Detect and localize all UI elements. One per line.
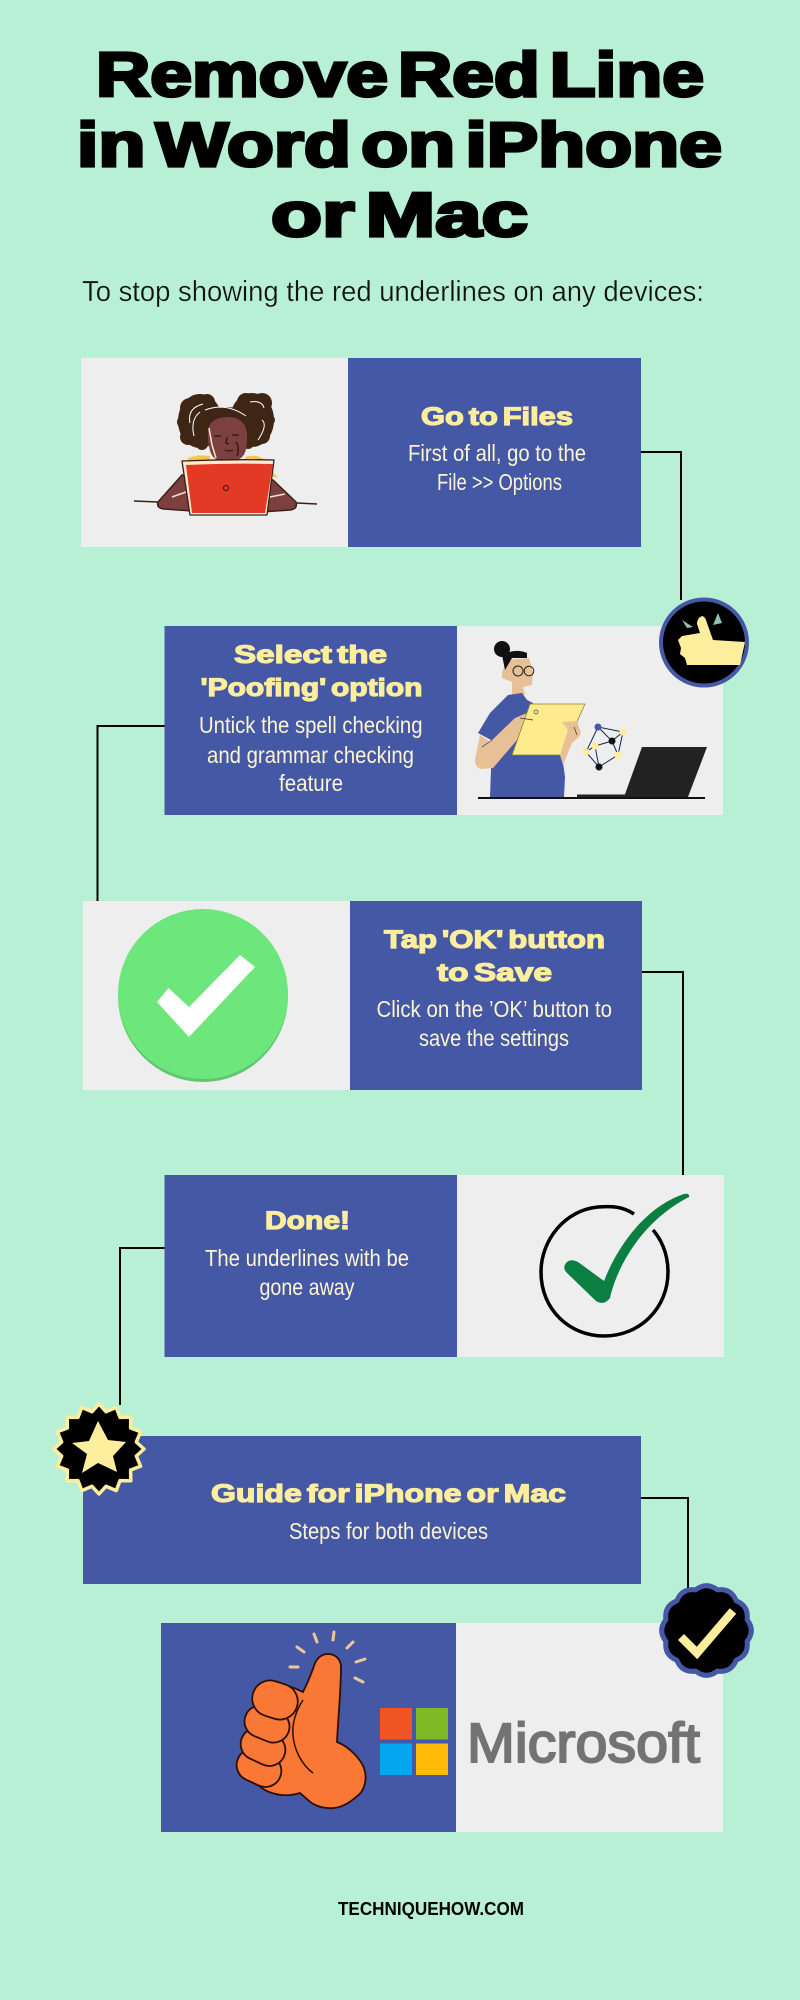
text: done body: The underlines with be (205, 1245, 409, 1271)
connector: step 1 to step 2 (641, 452, 681, 600)
panel: done (164, 1175, 724, 1357)
title (77, 41, 722, 250)
badge: check mark (662, 1586, 751, 1675)
heading: select the poofing option: 'Poofing' option (200, 674, 422, 702)
title: in Word on iPhone (77, 111, 722, 180)
text: tap ok body: save the settings (419, 1025, 569, 1051)
subtitle: To stop showing the red underlines on any devices: (82, 276, 704, 308)
text: go to files body (408, 440, 586, 495)
text: go to files body: File >> Options (437, 469, 562, 495)
text: done body (205, 1245, 409, 1300)
text: go to files body: First of all, go to the (408, 440, 586, 466)
title: or Mac (271, 181, 528, 250)
text: select the poofing body: Untick the spell checking (199, 712, 422, 738)
panel: guide for iphone or mac (83, 1436, 641, 1584)
text: tap ok body: Click on the ’OK’ button to (376, 996, 612, 1022)
badge: star (54, 1404, 144, 1494)
panel: select the poofing option (164, 626, 723, 815)
icon: microsoft logo squares (380, 1708, 448, 1775)
text: select the poofing body: feature (279, 770, 343, 796)
panel: tap ok button (83, 901, 642, 1090)
text: select the poofing body: and grammar checking (207, 742, 414, 768)
text: select the poofing body (199, 712, 422, 796)
heading: select the poofing option (200, 641, 422, 702)
heading: tap ok button: Tap 'OK' button (384, 926, 605, 954)
connector: step 2 to step 3 (98, 726, 165, 901)
icon: orange thumbs up (231, 1632, 366, 1808)
icon: girl with red laptop (134, 393, 317, 515)
heading: select the poofing option: Select the (234, 641, 387, 669)
heading: go to files: Go to Files (421, 403, 573, 431)
connector: step 4 to step 5 (120, 1248, 165, 1405)
heading: done: Done! (265, 1207, 350, 1235)
footer: site name: TECHNIQUEHOW.COM (338, 1899, 524, 1919)
text: microsoft wordmark: Microsoft (467, 1711, 700, 1774)
title: Remove Red Line (96, 41, 704, 110)
connector: step 3 to step 4 (642, 972, 683, 1175)
panel: go to files (81, 358, 641, 547)
heading: tap ok button: to Save (437, 959, 552, 987)
badge: thumbs up (661, 600, 747, 686)
text: guide body: Steps for both devices (289, 1518, 488, 1544)
icon: woman with tablet and laptop (475, 641, 707, 798)
connector: step 5 to final panel (641, 1498, 688, 1590)
text: done body: gone away (260, 1274, 355, 1300)
panel: microsoft final (161, 1623, 723, 1832)
icon: green tick in circle (541, 1194, 689, 1336)
text: tap ok body (376, 996, 612, 1051)
heading: guide for iphone or mac: Guide for iPhone or Mac (211, 1480, 566, 1508)
heading: tap ok button (384, 926, 605, 987)
icon: green check circle (118, 909, 288, 1082)
